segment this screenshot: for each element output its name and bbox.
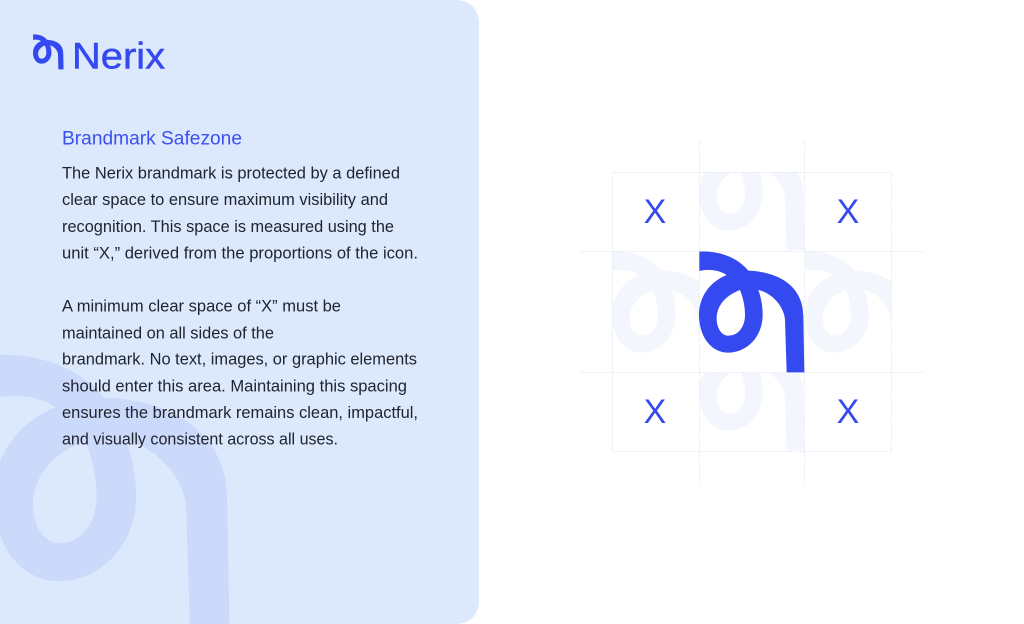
ghost brandmark: top [699,172,804,250]
text block: minimum clear space rules: ensures the brandmark remains clean, impactful, [62,404,418,422]
text block: minimum clear space rules: brandmark. No text, images, or graphic elements [62,350,417,368]
icon: main brandmark [699,252,804,372]
ghost brandmark: right [805,252,891,352]
text block: clear space intro: recognition. This space is measured using the [62,218,394,236]
text block: clear space intro: clear space to ensure maximum visibility and [62,191,388,209]
safezone diagram [580,130,924,483]
heading: Brandmark Safezone: Brandmark Safezone [62,128,242,150]
ghost brandmark: left [612,252,699,352]
unit marker X: bottom left: X [644,393,666,431]
watermark brandmark icon [0,355,229,624]
text block: clear space intro: unit “X,” derived from the proportions of the icon. [62,244,418,262]
text block: minimum clear space rules: maintained on all sides of the [62,324,274,342]
guide grid [580,140,924,483]
ghost brandmark: bottom [699,373,804,450]
unit marker X: top left: X [644,193,666,231]
text block: minimum clear space rules: and visually consistent across all uses. [62,430,338,448]
logo wordmark: Nerix [72,36,166,76]
unit marker X: bottom right: X [837,393,859,431]
text block: clear space intro [62,164,418,262]
logo: Nerix [33,34,166,76]
text block: clear space intro: The Nerix brandmark is protected by a defined [62,164,400,182]
unit marker X: top right: X [837,193,859,231]
panel: left description panel [0,0,479,624]
text block: minimum clear space rules: A minimum clear space of “X” must be [62,298,341,316]
text block: minimum clear space rules [62,298,418,448]
icon: logo brandmark [33,34,64,69]
text block: minimum clear space rules: should enter this area. Maintaining this spacing [62,378,407,396]
